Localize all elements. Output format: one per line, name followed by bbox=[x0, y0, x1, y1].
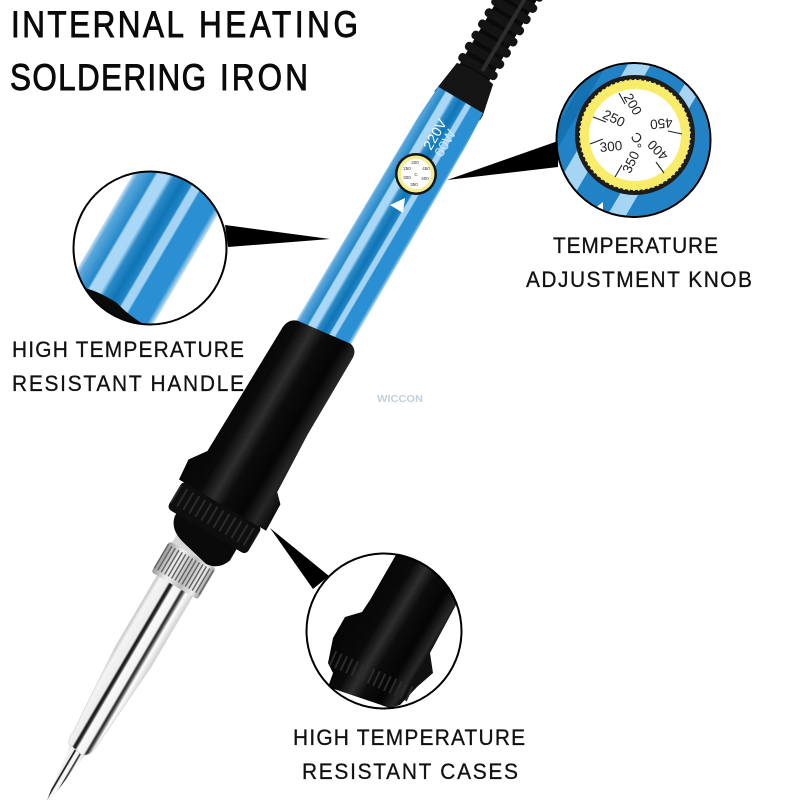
label: high temperature resistant handle: HIGH TEMPERATURE bbox=[12, 336, 244, 362]
title: SOLDERING bbox=[10, 58, 206, 99]
blue handle bbox=[292, 85, 486, 357]
panel: handle magnifier bbox=[72, 170, 228, 326]
soldering tip bbox=[40, 743, 87, 800]
label: temperature adjustment knob: TEMPERATURE bbox=[553, 232, 718, 258]
temperature knob on handle: 250 bbox=[403, 166, 411, 171]
knob dial: 250 bbox=[601, 107, 627, 130]
handle marking bbox=[420, 116, 459, 160]
knob dial: 400 bbox=[645, 137, 671, 163]
label: high temperature resistant cases: RESISTANT CASES bbox=[302, 758, 518, 784]
title bbox=[10, 5, 358, 99]
sleeve detail bbox=[328, 556, 456, 708]
silver neck bbox=[171, 531, 220, 569]
label: high temperature resistant cases bbox=[293, 724, 525, 784]
spring cable bbox=[452, 0, 548, 89]
handle marking: 220V bbox=[420, 116, 450, 152]
knob dial: °C bbox=[628, 129, 649, 151]
knurled nut bbox=[151, 541, 216, 600]
metal tube bbox=[60, 574, 194, 762]
ring detail bbox=[332, 658, 412, 695]
label: temperature adjustment knob: ADJUSTMENT KNOB bbox=[526, 266, 752, 292]
knob dial: 350 bbox=[619, 149, 642, 175]
knob dial: 200 bbox=[620, 91, 645, 118]
title: INTERNAL bbox=[11, 5, 184, 46]
black sleeve detail bbox=[86, 288, 142, 323]
knob dial bbox=[575, 75, 695, 195]
temperature knob on handle: 400 bbox=[421, 176, 429, 181]
temperature knob on handle: 200 bbox=[411, 160, 419, 165]
pointer: cases bbox=[270, 528, 329, 589]
handle marking: 60W bbox=[431, 126, 459, 160]
label: high temperature resistant handle bbox=[12, 336, 244, 396]
black neck bbox=[162, 510, 239, 573]
locking ring bbox=[167, 481, 262, 555]
title: IRON bbox=[220, 58, 308, 99]
title: HEATING bbox=[199, 5, 358, 46]
label: high temperature resistant handle: RESISTANT HANDLE bbox=[12, 370, 244, 396]
pointer: handle bbox=[225, 225, 330, 247]
label: temperature adjustment knob bbox=[526, 232, 752, 292]
panel: cases magnifier bbox=[306, 545, 462, 708]
pointer: knob bbox=[447, 141, 558, 180]
knob dial: 300 bbox=[599, 138, 623, 155]
temperature knob on handle: 350 bbox=[410, 182, 418, 187]
cable boot bbox=[433, 59, 500, 120]
temperature knob on handle bbox=[395, 153, 437, 195]
watermark: WICCON bbox=[377, 394, 423, 405]
temperature knob on handle: C bbox=[414, 172, 418, 177]
soldering iron body bbox=[3, 0, 575, 800]
label: high temperature resistant cases: HIGH TEMPERATURE bbox=[293, 724, 525, 750]
arrow marker on handle bbox=[390, 198, 405, 213]
knob dial: 450 bbox=[650, 115, 673, 132]
temperature knob on handle: 300 bbox=[403, 175, 411, 180]
black sleeve bbox=[177, 303, 370, 531]
temperature knob on handle: 450 bbox=[422, 166, 430, 171]
panel: knob magnifier bbox=[556, 62, 712, 218]
